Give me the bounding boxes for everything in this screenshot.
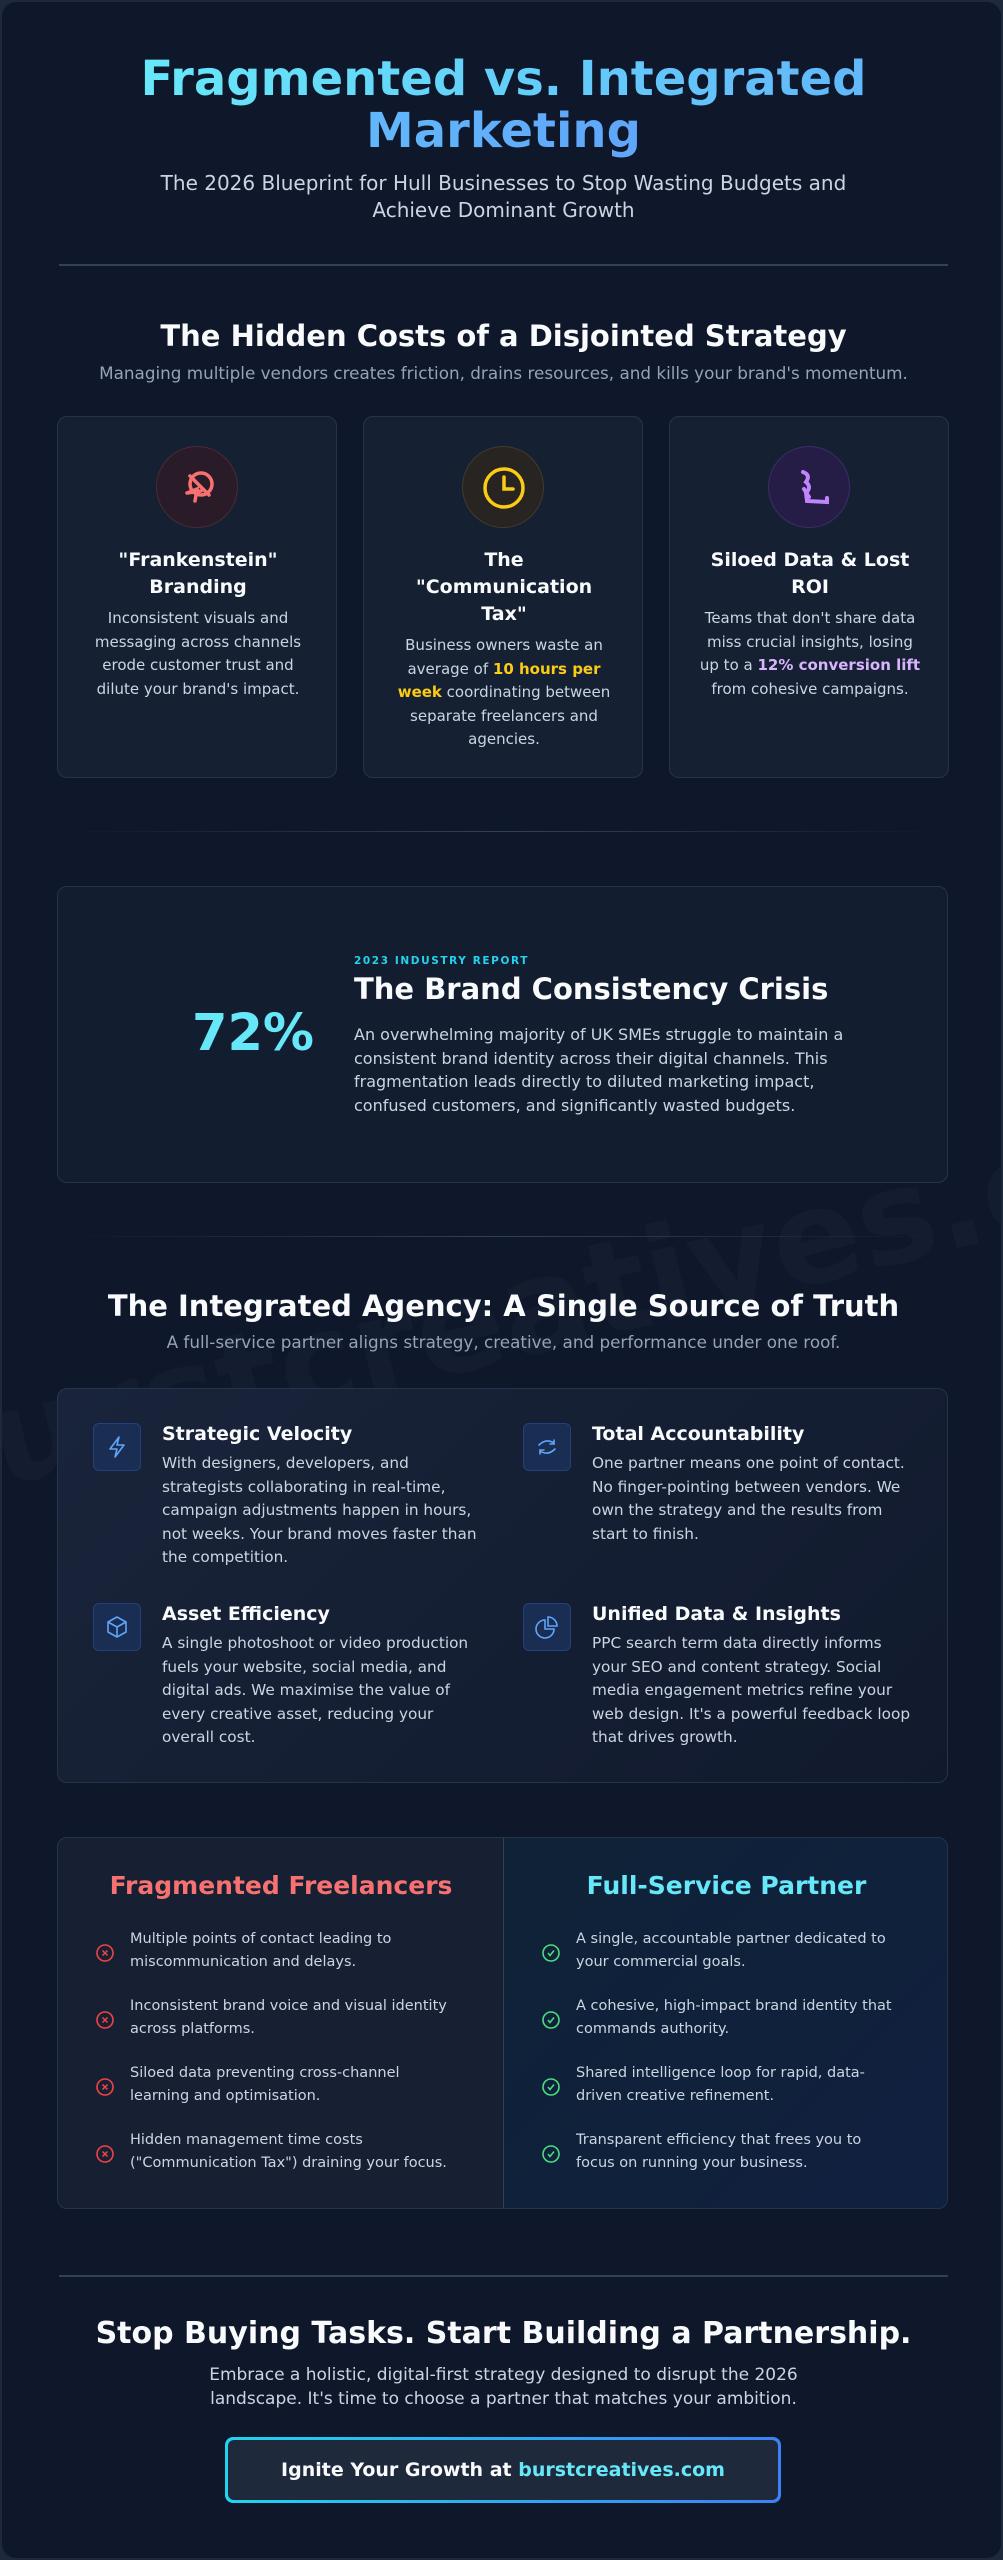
heading: Fragmented Freelancers — [110, 1871, 452, 1900]
card title: ROI — [791, 576, 829, 598]
feature: unified data — [523, 1603, 910, 1746]
heading: integrated agency: The Integrated Agency: A Single Source of Truth — [108, 1289, 899, 1323]
card title — [711, 549, 909, 598]
feature: unified data: Unified Data & Insights — [592, 1603, 841, 1625]
icon: pie chart — [523, 1603, 571, 1651]
feature: unified data: PPC search term data directly informs — [592, 1634, 882, 1652]
stat heading: The Brand Consistency Crisis — [354, 972, 828, 1006]
icon: broken chart — [768, 446, 850, 528]
list: positives: Shared intelligence loop for rapid, data-driven creative refinement. — [576, 2065, 865, 2104]
list: positives — [542, 1931, 892, 2171]
title: Fragmented vs. Integrated — [140, 51, 867, 107]
icon: lightning — [93, 1423, 141, 1471]
icon: cube — [93, 1603, 141, 1651]
column: full-service partner — [504, 1838, 949, 2210]
card text: Inconsistent visuals and messaging across channels erode customer trust and dilute your brand's impact. — [95, 609, 301, 698]
column: fragmented freelancers — [58, 1838, 504, 2210]
feature: strategic velocity — [93, 1423, 477, 1566]
card title — [118, 549, 278, 598]
card: communication tax — [363, 416, 643, 778]
subheading: integrated agency: A full-service partner aligns strategy, creative, and performance under one roof. — [167, 1332, 840, 1352]
feature: total accountability — [523, 1423, 905, 1542]
card: frankenstein branding — [57, 416, 337, 778]
label: 2023 INDUSTRY REPORT — [354, 955, 529, 967]
feature: total accountability: Total Accountability — [592, 1423, 804, 1445]
subtitle: The 2026 Blueprint for Hull Businesses to Stop Wasting Budgets and Achieve Dominant Growth — [161, 171, 846, 222]
stat text: An overwhelming majority of UK SMEs struggle to maintain a consistent brand identity across their digital channels. This fragmentation leads directly to diluted marketing impact, confused customers, and significantly wasted budgets. — [354, 1025, 843, 1114]
feature: unified data: your SEO and content strategy. Social media engagement metrics refine your web design. It's a powerful feedback loop that drives growth. — [592, 1658, 910, 1746]
icon: handshake — [523, 1423, 571, 1471]
heading: Full-Service Partner — [587, 1871, 866, 1900]
card title: "Communication — [416, 576, 592, 598]
cta button: Ignite Your Growth at burstcreatives.com — [281, 2459, 725, 2481]
heading: hidden costs: The Hidden Costs of a Disjointed Strategy — [160, 319, 847, 353]
feature: asset efficiency: A single photoshoot or video production fuels your website, social media, and digital ads. We maximise the value of every creative asset, reducing your overall cost. — [162, 1634, 468, 1746]
feature: asset efficiency: Asset Efficiency — [162, 1603, 330, 1625]
card: siloed data — [669, 416, 949, 778]
card title: The — [484, 549, 524, 571]
card title: Siloed Data & Lost — [711, 549, 909, 571]
title: Marketing — [366, 103, 641, 159]
list: negatives: Siloed data preventing cross-channel learning and optimisation. — [130, 2065, 400, 2104]
list: positives: Transparent efficiency that frees you to focus on running your business. — [576, 2132, 861, 2171]
cta text: Embrace a holistic, digital-first strategy designed to disrupt the 2026 landscape. It's time to choose a partner that matches your ambition. — [209, 2365, 798, 2408]
panel: comparison — [57, 1837, 948, 2209]
subheading: hidden costs: Managing multiple vendors creates friction, drains resources, and kills your brand's momentum. — [99, 363, 908, 383]
list: negatives: Hidden management time costs ("Communication Tax") draining your focus. — [130, 2132, 447, 2171]
card text: Business owners waste an average of 10 hours per week coordinating between separate freelancers and agencies. — [398, 636, 610, 748]
cta button — [225, 2437, 781, 2503]
icon: clock — [462, 446, 544, 528]
feature: strategic velocity: Strategic Velocity — [162, 1423, 352, 1445]
list: negatives: Multiple points of contact leading to miscommunication and delays. — [130, 1931, 391, 1970]
list: negatives: Inconsistent brand voice and visual identity across platforms. — [130, 1998, 447, 2037]
stat: 72%: 72% — [192, 1004, 314, 1063]
card text: Teams that don't share data miss crucial insights, losing up to a 12% conversion lift from cohesive campaigns. — [700, 609, 920, 698]
card title: Branding — [149, 576, 247, 598]
panel: benefits — [57, 1388, 948, 1783]
feature: total accountability: One partner means one point of contact. No finger-pointing between vendors. We own the strategy and the results from start to finish. — [592, 1454, 905, 1542]
list: positives: A cohesive, high-impact brand identity that commands authority. — [576, 1998, 892, 2037]
icon: broken brand — [156, 446, 238, 528]
list: negatives — [96, 1931, 447, 2171]
cta heading: Stop Buying Tasks. Start Building a Partnership. — [96, 2316, 911, 2351]
title — [140, 51, 867, 159]
card title — [416, 549, 592, 625]
stat panel: brand consistency crisis — [57, 886, 948, 1183]
list: positives: A single, accountable partner dedicated to your commercial goals. — [576, 1931, 886, 1970]
card title: "Frankenstein" — [118, 549, 278, 571]
feature: asset efficiency — [93, 1603, 468, 1746]
card title: Tax" — [481, 603, 527, 625]
feature: strategic velocity: With designers, developers, and strategists collaborating in real-time, campaign adjustments happen in hours, not weeks. Your brand moves faster than the competition. — [162, 1454, 477, 1566]
